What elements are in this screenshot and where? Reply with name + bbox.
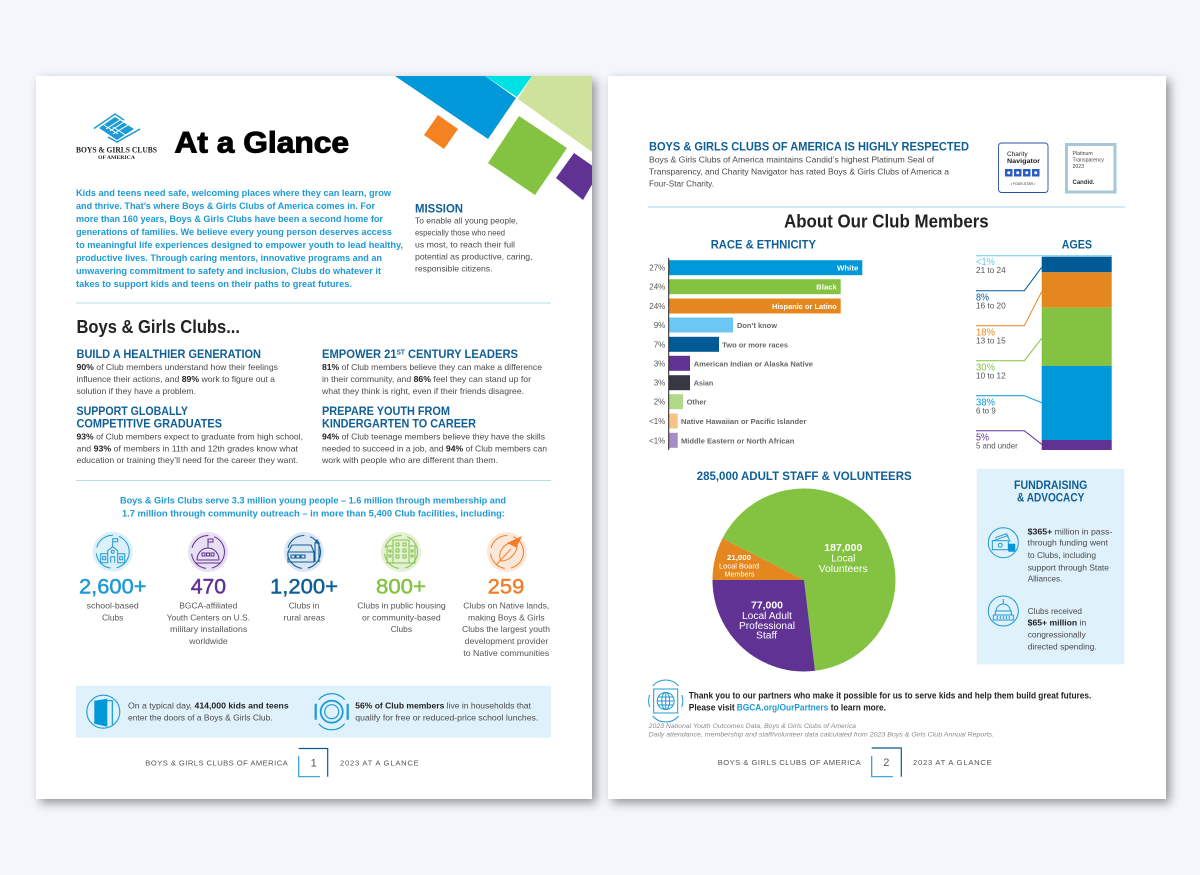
stat: native lands clubs: to Native communities [463,648,549,658]
block: support globally competitive graduates: 93% of Club members expect to graduate from high school, [76,432,303,442]
stat: rural clubs: Clubs in [289,600,320,610]
text: congressionally directed spending: directed spending. [1028,642,1097,652]
block: prepare youth from kindergarten to career: work with people who are different than them. [321,455,498,465]
page 1 footer: BOYS & GIRLS CLUBS OF AMERICA [145,758,289,768]
bar chart: race & ethnicity: Hispanic or Latino [772,302,837,311]
block: empower 21st century leaders [321,347,542,396]
page 2 footer: 2023 AT A GLANCE [913,758,992,767]
bar chart: race & ethnicity: Don’t know [737,321,777,330]
stacked bar: ages: AGES [1062,238,1092,252]
badge: Candid platinum transparency: Platinum [1072,151,1093,157]
text: pass-through funding: to Clubs, including [1028,550,1096,560]
text: congressionally directed spending: $65+ million in [1028,618,1087,628]
stacked bar: ages: 30% [976,362,995,373]
partners thank-you text: to learn more. [831,703,886,713]
block: support globally competitive graduates: SUPPORT GLOBALLY [76,404,188,418]
block: empower 21st century leaders: CENTURY LEADERS [405,347,518,361]
stacked bar: ages: 18% [976,327,995,338]
pie chart: adult staff & volunteers: 285,000 ADULT STAFF & VOLUNTEERS [697,469,912,483]
page 1 footer: 2023 AT A GLANCE [340,758,419,768]
text: school lunches: qualify for free or reduced-price school lunches. [355,713,538,723]
stacked bar: ages: 5 and under [976,440,1018,450]
block: build a healthier generation: BUILD A HEALTHIER GENERATION [76,347,261,361]
block: build a healthier generation: 90% of Club members understand how their feelings [76,362,278,372]
source notes: Daily attendance, membership and staff/volunteer data calculated from 2023 Boys & Girls Club Annual Reports. [649,732,994,739]
stat: military youth centers: Youth Centers on U.S. [167,612,250,622]
panel: fundraising & advocacy: & ADVOCACY [1017,490,1084,504]
bar chart: race & ethnicity: Two or more races [722,340,788,349]
text: school lunches [355,701,538,723]
stat: military youth centers: military installations [170,624,247,634]
icon: capitol [988,596,1018,626]
stacked bar: ages: 8% [976,292,989,303]
stat: native lands clubs: 259 [488,574,524,598]
intro paragraph: takes to support kids and teens on their paths to great futures. [76,279,352,289]
pie chart: adult staff & volunteers: Members [724,570,755,578]
page 2 footer [718,748,992,777]
source notes [648,723,994,739]
stat: school-based clubs: school-based [87,600,139,610]
text: pass-through funding: $365+ million in pass- [1028,526,1112,536]
block: build a healthier generation: influence their actions, and 89% work to figure out a [76,374,275,384]
badge: Charity Navigator [998,143,1048,192]
source notes: 2023 National Youth Outcomes Data, Boys & Girls Clubs of America [648,723,856,730]
decorative geometric shapes [395,76,600,200]
mission: responsible citizens. [415,264,492,274]
bar chart: race & ethnicity: Other [687,398,706,407]
badge: Candid platinum transparency: Candid. [1072,180,1095,186]
pie chart: adult staff & volunteers: Volunteers [819,564,868,575]
block: support globally competitive graduates: and 93% of members in 11th and 12th grades know what [76,444,299,454]
stacked bar: ages: 10 to 12 [976,370,1006,380]
bar chart: race & ethnicity: <1% [649,436,665,445]
stat: military youth centers [167,532,250,646]
text: daily attendance: enter the doors of a Boys & Girls Club. [128,713,273,723]
bar chart: race & ethnicity: 9% [654,321,665,330]
mission: MISSION [415,202,463,216]
intro paragraph: to meaningful life experiences designed to empower youth to lead healthy, [76,240,403,250]
pie chart: adult staff & volunteers: Local Board [719,561,759,570]
partners thank-you text [689,691,1091,713]
block: support globally competitive graduates: COMPETITIVE GRADUATES [76,416,222,430]
stat: school-based clubs [79,532,146,622]
intro paragraph: more than 160 years, Boys & Girls Clubs have been a second home for [76,214,383,224]
stacked bar: ages: 5% [976,432,989,443]
block: empower 21st century leaders: ST [397,350,406,356]
logo: Boys & Girls Clubs of America: OF AMERICA [98,155,135,161]
stacked bar: ages: 38% [976,397,995,408]
heading: About Our Club Members: About Our Club Members [784,211,989,232]
highly respected block [649,140,969,188]
partners thank-you text: Thank you to our partners who make it possible for us to serve kids and help them build great futures. [689,691,1091,701]
block: support globally competitive graduates [76,404,303,465]
pie chart: adult staff & volunteers [697,469,912,671]
block: prepare youth from kindergarten to career: KINDERGARTEN TO CAREER [322,416,476,430]
stat: native lands clubs [462,532,550,658]
intro paragraph: productive lives. Through caring mentors, innovative programs and an [76,253,382,263]
icon: globe [649,680,683,722]
block: prepare youth from kindergarten to career [321,404,547,465]
badge: Charity Navigator: • FOUR-STAR • [1011,182,1036,186]
block: empower 21st century leaders: 81% of Club members believe they can make a difference [322,362,542,372]
bar chart: race & ethnicity [649,238,862,450]
partners thank-you text: BGCA.org/OurPartners [737,703,828,713]
bar chart: race & ethnicity: Black [816,282,837,292]
bar chart: race & ethnicity: 24% [649,302,665,311]
logo: Boys & Girls Clubs of America [76,114,158,161]
text: pass-through funding [1028,526,1112,584]
intro paragraph [76,188,403,289]
bar chart: race & ethnicity: 2% [654,398,665,407]
pie chart: adult staff & volunteers: Local Adult [742,611,792,622]
stat: public housing clubs: Clubs in public housing [357,600,446,610]
icon: feather [487,532,527,572]
badge: Candid platinum transparency [1066,144,1115,192]
icon: school [93,532,133,572]
intro paragraph: and thrive. That’s where Boys & Girls Clubs of America comes in. For [76,201,375,211]
highly respected block: Boys & Girls Clubs of America maintains Candid’s highest Platinum Seal of [649,154,935,164]
stat: military youth centers: 470 [191,574,226,598]
stacked bar: ages: 21 to 24 [976,265,1006,275]
stat: public housing clubs: Clubs [391,624,412,634]
stacked bar: ages [976,238,1112,450]
pie chart: adult staff & volunteers: Professional [739,621,795,632]
stat: public housing clubs: or community-based [362,612,441,622]
stat: military youth centers: BGCA-affiliated [179,600,238,610]
text: pass-through funding: support through State [1028,562,1109,572]
pie chart: adult staff & volunteers: Local [831,554,855,564]
bar chart: race & ethnicity: Asian [694,379,714,388]
heading: Boys & Girls Clubs...: Boys & Girls Clubs... [76,316,240,337]
page 1 footer [145,748,419,777]
icon: rural barn [284,532,324,572]
text: congressionally directed spending: Clubs received [1028,606,1082,616]
stat: military youth centers: worldwide [188,636,228,646]
mission: especially those who need [415,228,505,238]
icon: open door [87,695,120,728]
stat: rural clubs: rural areas [284,612,325,622]
stacked bar: ages: 6 to 9 [976,405,996,415]
text: daily attendance: On a typical day, 414,000 kids and teens [128,701,289,711]
bar chart: race & ethnicity: Native Hawaiian or Pacific Islander [681,417,806,426]
panel: page 1 [36,76,600,799]
icon: apartments [381,532,421,572]
highly respected block: Four-Star Charity. [649,178,714,188]
intro paragraph: unwavering commitment to safety and inclusion, Clubs do whatever it [76,266,381,276]
block: empower 21st century leaders: what they think is right, even if their friends disagree. [321,386,524,396]
stacked bar: ages: 13 to 15 [976,335,1006,345]
stat: native lands clubs: making Boys & Girls [468,612,545,622]
stacked bar: ages: <1% [976,257,995,268]
icon: money [988,528,1018,558]
pie chart: adult staff & volunteers: Staff [756,630,777,642]
stat: native lands clubs: development provider [465,636,548,646]
block: build a healthier generation [76,347,278,396]
bar chart: race & ethnicity: <1% [649,417,665,426]
bar chart: race & ethnicity: Middle Eastern or North African [681,436,795,445]
highly respected block: BOYS & GIRLS CLUBS OF AMERICA IS HIGHLY RESPECTED [649,140,969,154]
reach statement: 1.7 million through community outreach – in more than 5,400 Club facilities, including: [122,508,505,518]
bar chart: race & ethnicity: American Indian or Alaska Native [694,359,813,368]
page 1 footer: 1 [311,758,317,770]
highly respected block: Transparency, and Charity Navigator has rated Boys & Girls Clubs of America a [649,167,949,177]
text: congressionally directed spending: congressionally [1028,630,1086,640]
page 2 footer: BOYS & GIRLS CLUBS OF AMERICA [718,758,862,767]
bar chart: race & ethnicity: 27% [649,264,665,272]
stat: native lands clubs: Clubs on Native lands, [463,600,549,610]
mission: potential as productive, caring, [415,252,532,262]
stat: rural clubs [270,532,338,622]
callout band [76,686,551,738]
stacked bar: ages: 16 to 20 [976,300,1006,310]
panel: fundraising & advocacy [977,469,1124,664]
pie chart: adult staff & volunteers: 77,000 [751,600,783,612]
block: prepare youth from kindergarten to career: PREPARE YOUTH FROM [322,404,450,418]
partners thank-you text: Please visit [689,703,735,713]
bar chart: race & ethnicity: 24% [649,282,665,292]
badge: Charity Navigator: Navigator [1007,158,1041,165]
intro paragraph: generations of families. We believe every young person deserves access [76,227,392,237]
mission [415,202,532,274]
bar chart: race & ethnicity: 7% [654,340,665,349]
bar chart: race & ethnicity: RACE & ETHNICITY [711,238,816,252]
icon: military hut [188,532,228,572]
reach statement: Boys & Girls Clubs serve 3.3 million young people – 1.6 million through membership and [120,496,506,506]
stat: native lands clubs: Clubs the largest youth [462,624,550,634]
block: prepare youth from kindergarten to career: 94% of Club teenage members believe they have the skills [322,432,545,442]
stat: public housing clubs: 800+ [376,574,426,598]
badge: Candid platinum transparency: Transparency [1072,158,1104,164]
bar chart: race & ethnicity: White [837,264,858,272]
page 2 footer: 2 [883,757,889,769]
pie chart: adult staff & volunteers: 187,000 [824,543,863,554]
reach statement [120,496,506,518]
intro paragraph: Kids and teens need safe, welcoming places where they can learn, grow [76,188,392,198]
block: build a healthier generation: solution if they have a problem. [76,386,196,396]
text: pass-through funding: through funding went [1028,538,1109,548]
block: empower 21st century leaders: in their community, and 86% feel they can stand up for [322,374,531,384]
icon: plate [316,694,348,730]
text: school lunches: 56% of Club members live in households that [355,701,532,711]
pie chart: adult staff & volunteers: 21,000 [727,553,751,562]
badge: Candid platinum transparency: 2023 [1072,164,1084,170]
text: pass-through funding: Alliances. [1028,574,1062,584]
mission: us most, to reach their full [415,240,515,250]
panel: page 2 [608,76,1166,799]
stat: school-based clubs: Clubs [102,612,123,622]
stat: rural clubs: 1,200+ [270,574,338,598]
badge: Charity Navigator: Charity [1007,151,1028,158]
bar chart: race & ethnicity: 3% [654,359,665,368]
title: At a Glance [174,126,349,160]
stat: public housing clubs [357,532,446,634]
mission: To enable all young people, [415,216,518,226]
text: congressionally directed spending [1028,606,1097,652]
bar chart: race & ethnicity: 3% [654,379,665,388]
panel: fundraising & advocacy: FUNDRAISING [1014,478,1087,492]
block: prepare youth from kindergarten to career: needed to succeed in a job, and 94% of Club members can [322,444,547,454]
block: empower 21st century leaders: EMPOWER 21 [322,347,403,361]
block: support globally competitive graduates: education or training they’ll need for the career they want. [76,455,298,465]
text: daily attendance [128,701,289,723]
logo: Boys & Girls Clubs of America: BOYS & GIRLS CLUBS [76,146,158,154]
stat: school-based clubs: 2,600+ [79,574,146,598]
